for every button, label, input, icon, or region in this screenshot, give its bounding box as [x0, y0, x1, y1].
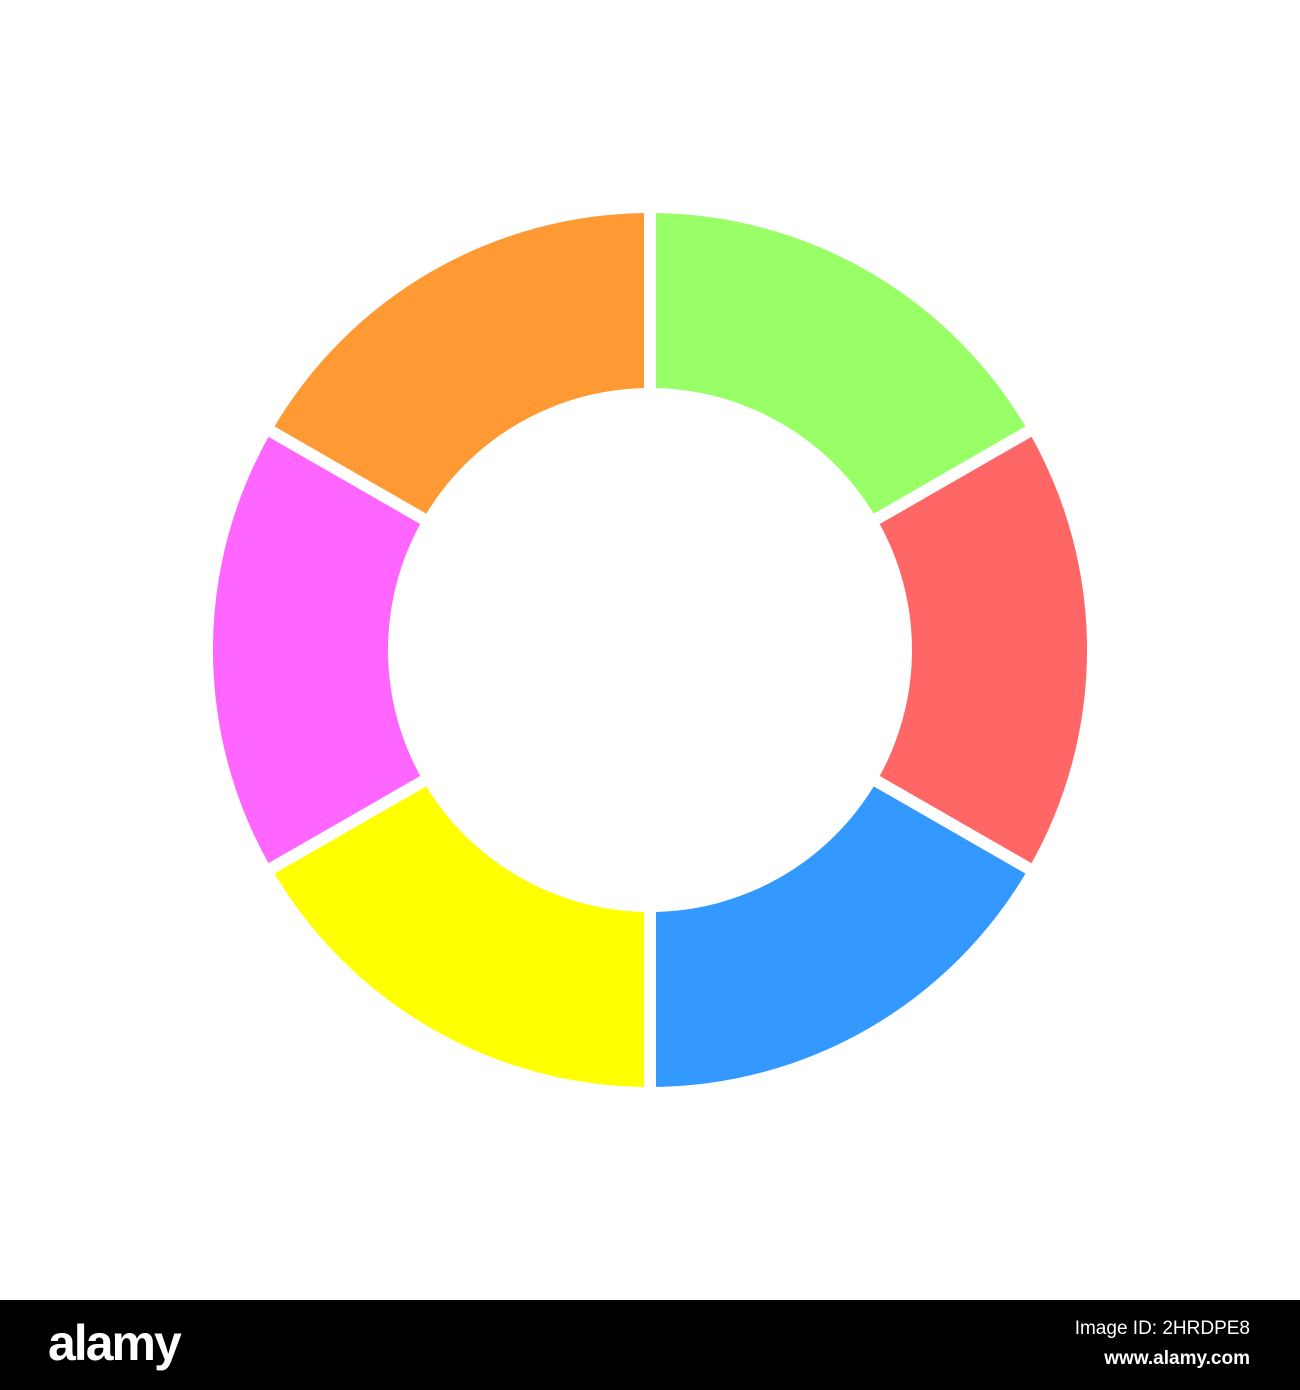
segment: yellow — [272, 781, 650, 1087]
segment: magenta — [213, 432, 423, 868]
footer bar — [0, 1300, 1300, 1390]
footer image id: www.alamy.com — [1104, 1348, 1250, 1369]
footer image id — [1075, 1318, 1250, 1369]
segment: green — [650, 213, 1028, 519]
segment: orange — [272, 213, 650, 519]
footer logo text: alamy — [48, 1315, 180, 1371]
footer image id: Image ID: 2HRDPE8 — [1075, 1318, 1250, 1339]
segment: red — [877, 432, 1087, 868]
segment: blue — [650, 781, 1028, 1087]
